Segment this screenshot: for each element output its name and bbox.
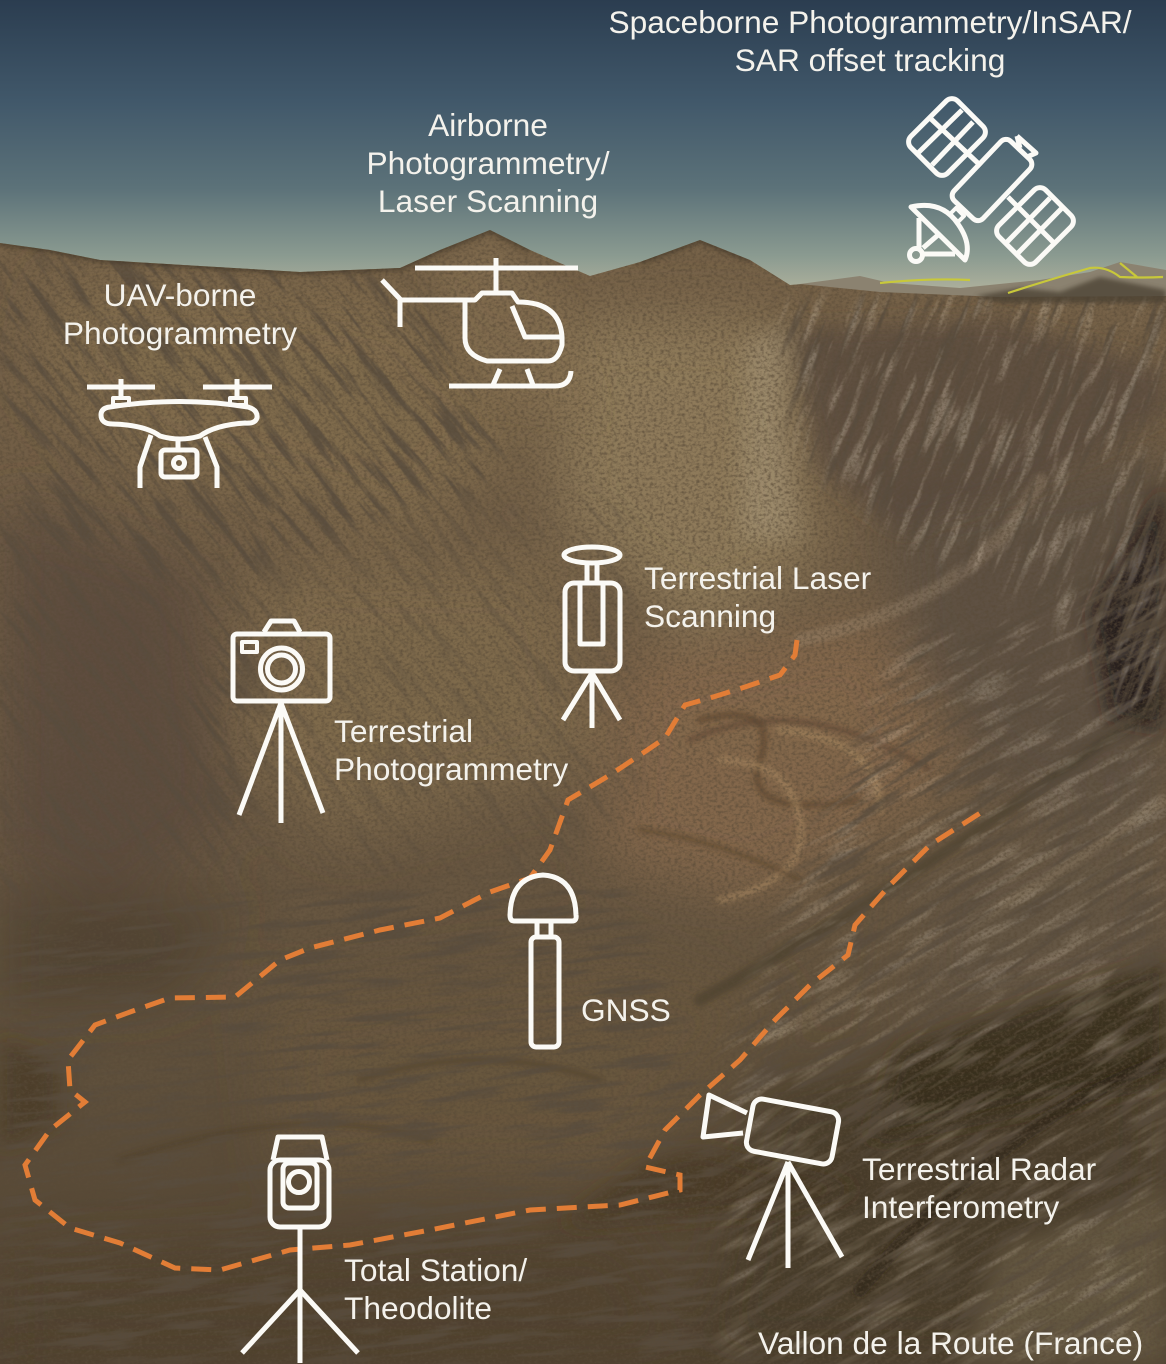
label: spaceborne: SAR offset tracking [735,42,1005,78]
icon: terrestrial radar [703,1095,842,1268]
icon: drone [87,379,272,488]
distant peaks with yellow outline [800,262,1166,303]
label: terrestrial laser scanning: Terrestrial Laser [644,560,872,596]
label: terrestrial photogrammetry: Terrestrial [334,713,473,749]
icon: camera on tripod [233,621,330,823]
label: GNSS: GNSS [581,992,671,1028]
label: terrestrial laser scanning: Scanning [644,598,776,634]
label: terrestrial radar interferometry: Terrestrial Radar [862,1151,1097,1187]
icon: helicopter [382,258,578,386]
label: UAV: UAV-borne [104,277,256,313]
label: airborne: Laser Scanning [378,183,598,219]
label: airborne: Photogrammetry/ [366,145,610,181]
label: UAV: Photogrammetry [63,315,297,351]
label: total station: Total Station/ [344,1252,527,1288]
label: terrestrial photogrammetry: Photogrammetry [334,751,568,787]
icon: GNSS antenna [510,875,576,1047]
label: terrestrial radar interferometry: Interferometry [862,1189,1059,1225]
icon: satellite [905,95,1077,268]
label: airborne: Airborne [428,107,548,143]
dashed outline: landslide boundary [25,640,985,1270]
icon: terrestrial laser scanner [563,547,620,728]
label: location: Vallon de la Route (France) [758,1325,1143,1361]
icon: total station [242,1137,358,1363]
label: total station: Theodolite [344,1290,492,1326]
label: spaceborne: Spaceborne Photogrammetry/InSAR/ [608,4,1132,40]
background: sky [0,0,1166,290]
